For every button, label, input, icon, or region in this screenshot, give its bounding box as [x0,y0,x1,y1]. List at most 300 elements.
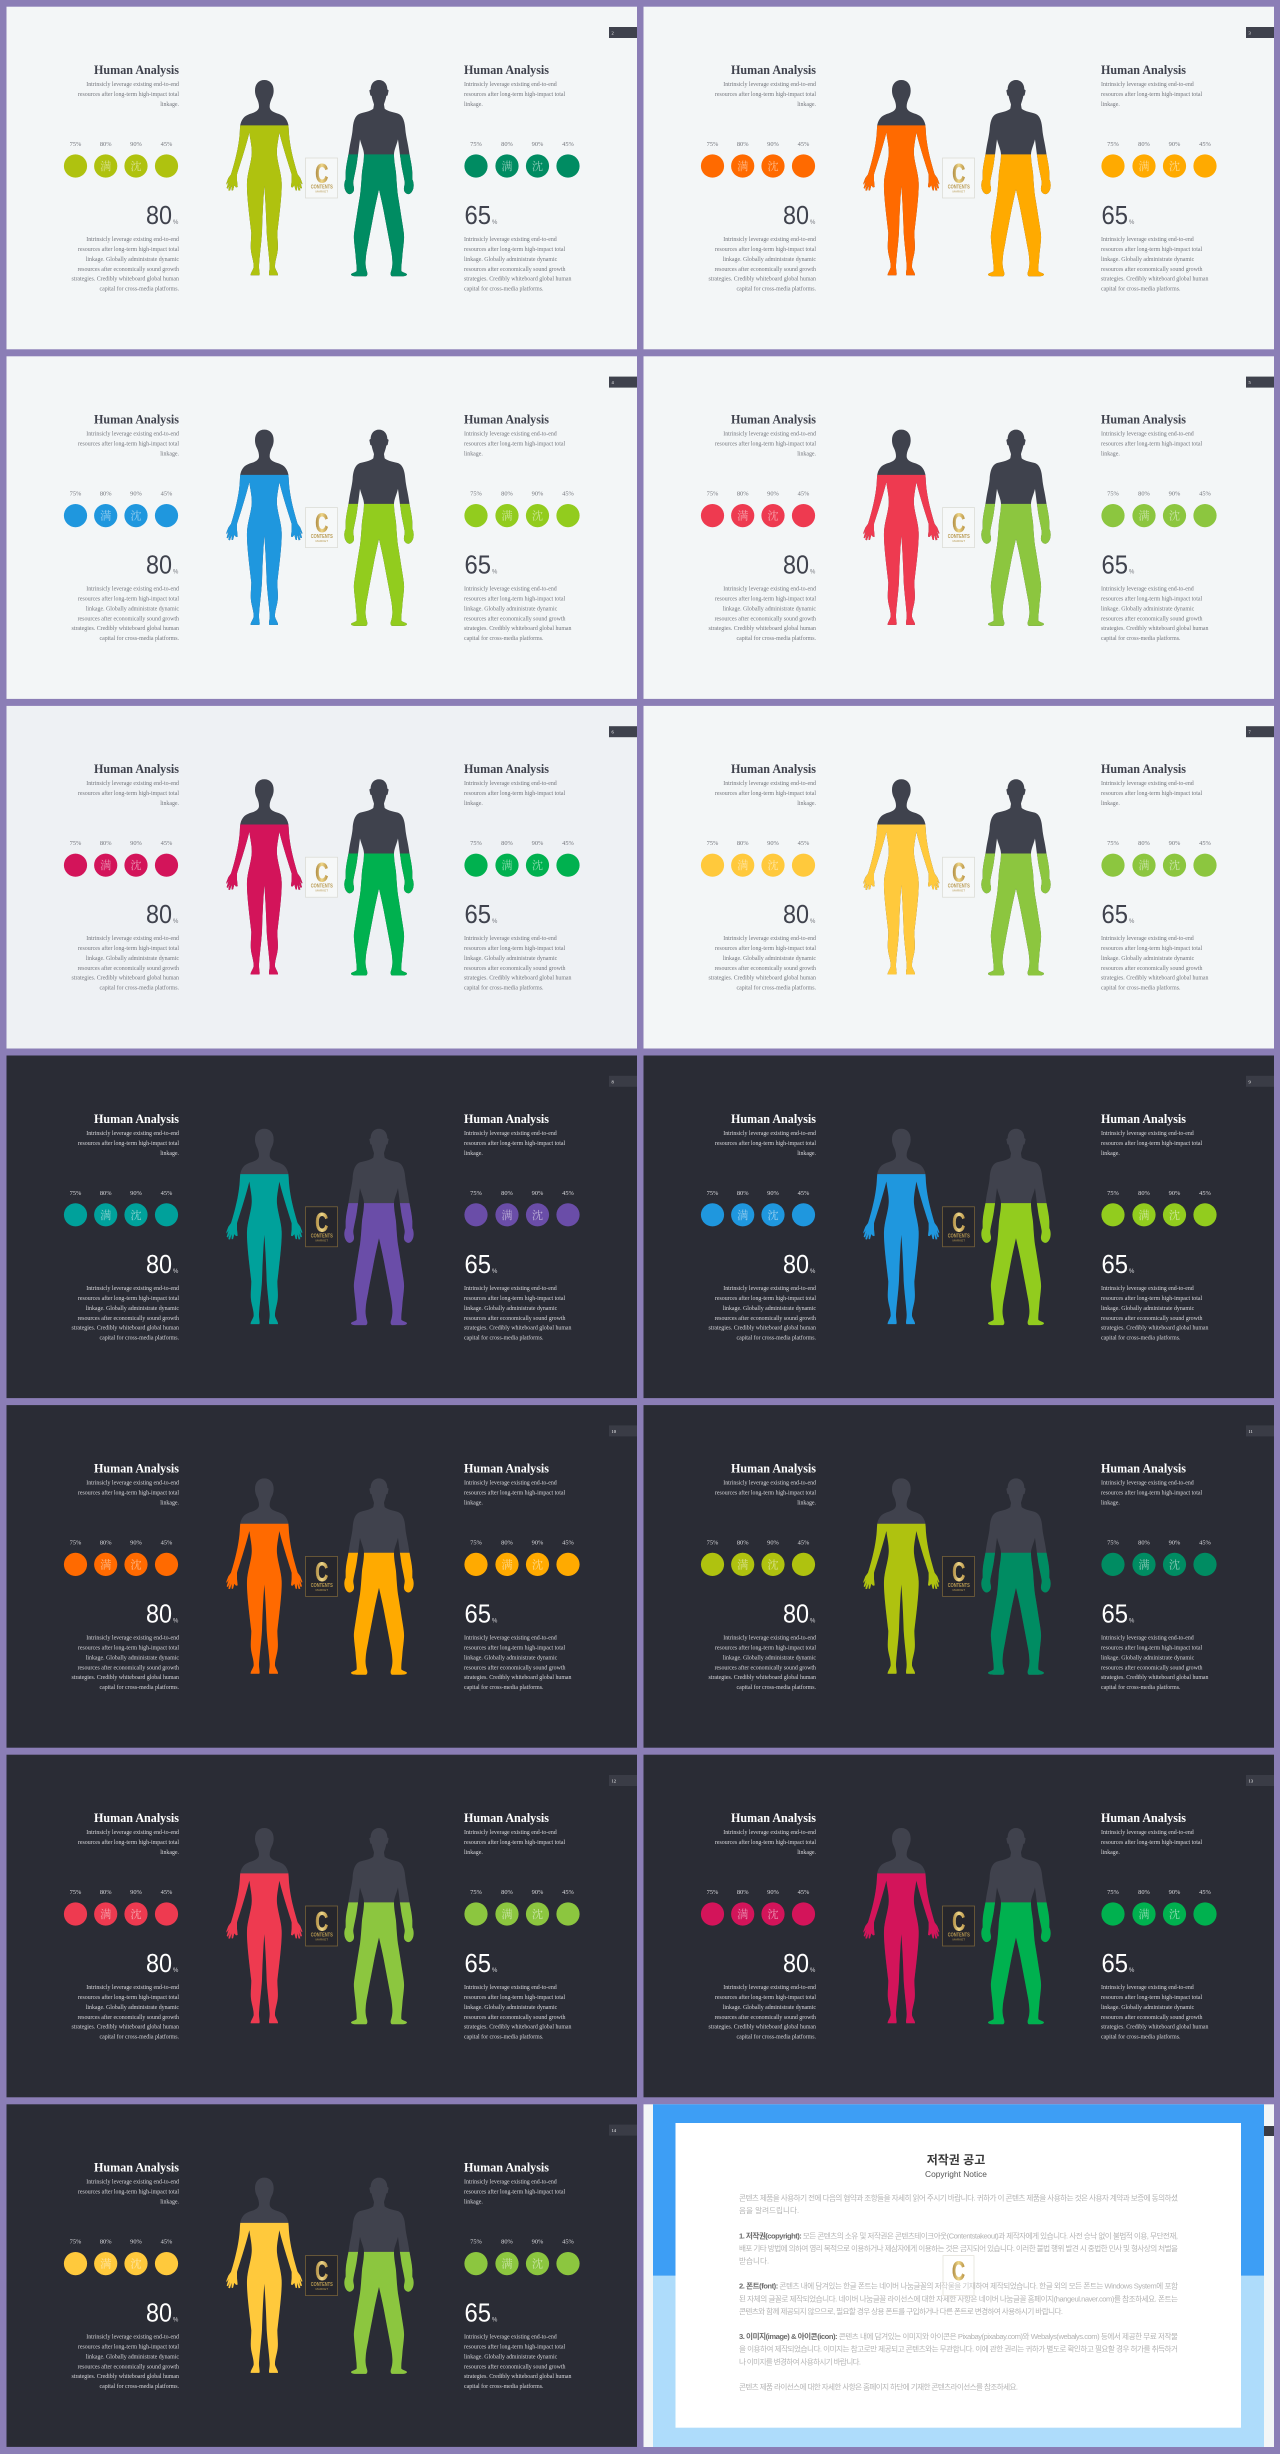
left text column: linkage. [797,1151,817,1157]
right paragraph: capital for cross-media platforms. [464,635,544,642]
right paragraph [1101,587,1209,642]
right paragraph: Intrinsicly leverage existing end-to-end [464,1286,557,1292]
left percentage circles [701,491,815,527]
left statistic: 80 [783,1950,809,1978]
right text column: resources after long-term high-impact total [464,2189,565,2196]
right paragraph: linkage. Globally administrate dynamic [464,2355,558,2361]
left percentage circles: 沈 [768,1557,778,1571]
right percentage circles [1101,141,1217,178]
right statistic: 65 [1102,552,1128,580]
right percentage circles: 75% [1107,141,1120,148]
left percentage circles: 75% [70,2239,82,2246]
left statistic: % [173,1968,179,1974]
right text column: Human Analysis [464,1111,549,1126]
contents logo: CONTENTS [948,534,970,540]
right percentage circles: 90% [532,1190,544,1197]
right percentage circles: 90% [532,2239,544,2246]
right percentage circles: 45% [562,1539,575,1546]
right percentage circles [1101,840,1217,877]
right paragraph [1101,1635,1209,1691]
notice closing line: 콘텐츠 제품 라이선스에 대한 자세한 사항은 홈페이지 하단에 기재한 콘텐츠라이선스를 참조하세요. [739,2382,1018,2392]
clause 2 font: 2. 폰트(font): 콘텐츠 내에 담겨있는 한글 폰트는 네이버 나눔글꼴의 저작물을 기재하여 제작되었습니다. 한글 외의 모든 폰트는 Windows System에 포함 [739,2280,1178,2290]
right paragraph [464,1286,572,1341]
right text column: Intrinsicly leverage existing end-to-end [464,1131,557,1137]
right text column: Human Analysis [1101,412,1186,427]
left percentage circles: 45% [161,491,173,498]
left percentage circles: 沈 [768,1208,778,1222]
right statistic: % [492,1269,498,1275]
left text column: resources after long-term high-impact total [715,1140,816,1147]
right percentage circles: 75% [470,141,483,148]
right percentage circles: 80% [1138,1889,1151,1896]
contents logo [942,857,974,897]
right paragraph [464,936,572,992]
right text column: linkage. [1101,102,1120,108]
left paragraph [709,936,817,992]
left text column: resources after long-term high-impact total [715,1839,816,1846]
right paragraph: linkage. Globally administrate dynamic [1101,2005,1195,2011]
female body figure [226,1828,302,2023]
female body figure [863,1828,939,2023]
left paragraph: Intrinsicly leverage existing end-to-end [86,1286,179,1292]
panel: slide 14 dark yellow and green [6,2104,637,2447]
clause 3 image and icon [739,2331,1178,2366]
left text column [715,62,817,108]
left percentage circles: 45% [161,1539,173,1546]
left paragraph: resources after economically sound growth [78,266,179,273]
left text column: linkage. [797,452,817,458]
right percentage circles: 45% [562,1190,575,1197]
left paragraph: resources after economically sound growth [78,2364,179,2371]
page number tag [1246,1775,1274,1786]
left text column: Human Analysis [731,761,816,776]
right text column [464,62,565,108]
left percentage circles [64,1539,178,1576]
right paragraph: resources after economically sound growth [464,965,565,972]
panel: copyright notice [644,2104,1274,2447]
right percentage circles: 75% [470,491,483,498]
left percentage circles: 满 [100,1907,111,1921]
right percentage circles: 满 [502,159,512,173]
right paragraph [464,587,572,642]
left paragraph: capital for cross-media platforms. [736,2034,817,2040]
left statistic: % [810,220,816,226]
left paragraph: resources after long-term high-impact total [78,1295,179,1302]
right percentage circles: 75% [470,1539,483,1546]
right percentage circles: 90% [1169,141,1181,148]
right text column: resources after long-term high-impact total [1101,790,1202,797]
left statistic: 80 [146,1950,172,1978]
panel: slide 7 yellow and green [644,706,1274,1048]
right paragraph: resources after long-term high-impact total [1101,1994,1202,2001]
right paragraph: capital for cross-media platforms. [1101,985,1181,992]
male body figure [344,779,414,976]
left statistic: % [810,1618,816,1624]
page number tag: 9 [1248,1079,1252,1084]
right paragraph: strategies. Credibly whiteboard global human [1101,276,1209,282]
right paragraph: strategies. Credibly whiteboard global human [464,2374,572,2380]
right text column: Intrinsicly leverage existing end-to-end [464,1480,557,1486]
left text column: Human Analysis [94,2160,179,2175]
left text column: Human Analysis [94,761,179,776]
right text column [464,1810,565,1856]
left percentage circles: 满 [100,509,111,523]
left paragraph: strategies. Credibly whiteboard global human [709,976,816,982]
left statistic: 80 [783,202,809,230]
contents logo: MARKET [953,889,965,893]
left paragraph: resources after long-term high-impact total [78,596,179,603]
right percentage circles: 75% [470,1190,483,1197]
page number tag [609,1076,637,1087]
left statistic: % [173,1618,179,1624]
left paragraph: resources after economically sound growth [78,616,179,623]
contents logo [306,2256,338,2296]
right paragraph: linkage. Globally administrate dynamic [464,1306,558,1312]
right percentage circles: 75% [470,2239,483,2246]
page number tag [609,27,637,38]
left statistic: % [810,570,816,576]
right percentage circles: 45% [1199,141,1212,148]
left percentage circles: 90% [130,2239,143,2246]
left text column: linkage. [160,1500,180,1506]
left percentage circles: 90% [130,141,143,148]
right percentage circles: 满 [502,509,512,523]
contents logo: CONTENTS [948,184,970,190]
contents logo watermark [943,2256,974,2296]
right percentage circles: 45% [1199,1539,1212,1546]
clause 3 image and icon: 3. 이미지(image) & 아이콘(icon): 콘텐츠 내에 담겨있는 이미지와 아이콘은 Pixabay(pixabay.com)와 Webalys(webalys.com) 등에서 제공한 무료 저작물 [739,2331,1178,2341]
left text column: linkage. [160,102,180,108]
right paragraph: resources after economically sound growth [464,1315,565,1322]
left text column: linkage. [160,801,180,807]
right paragraph: capital for cross-media platforms. [464,2383,544,2390]
right percentage circles: 满 [502,1907,512,1921]
right percentage circles: 45% [562,491,575,498]
right paragraph: Intrinsicly leverage existing end-to-end [464,2335,557,2341]
right statistic: % [1129,1968,1135,1974]
left percentage circles: 沈 [130,509,142,523]
right statistic: 65 [1102,1600,1128,1628]
left percentage circles: 80% [100,141,112,148]
contents logo: C [952,1557,965,1587]
right percentage circles: 75% [1107,1539,1120,1546]
left percentage circles: 沈 [768,509,778,523]
right percentage circles: 90% [1169,1539,1181,1546]
right text column: Human Analysis [464,62,549,77]
blue upper background [653,2104,1264,2276]
right percentage circles [464,840,580,877]
left paragraph: linkage. Globally administrate dynamic [723,2005,816,2011]
right statistic: % [492,919,498,925]
left paragraph: resources after long-term high-impact total [715,596,816,603]
right paragraph: resources after long-term high-impact total [1101,246,1202,253]
right text column [1101,1810,1202,1856]
contents logo: CONTENTS [948,1932,970,1938]
right text column [1101,1460,1202,1506]
left paragraph [709,1286,817,1341]
left percentage circles: 满 [737,858,748,872]
left paragraph: linkage. Globally administrate dynamic [86,2355,179,2361]
contents logo [942,1207,974,1247]
female body figure [863,779,939,975]
contents logo: C [315,1207,328,1237]
right percentage circles: 75% [1107,1889,1120,1896]
right text column: linkage. [464,2200,483,2206]
right percentage circles: 沈 [1169,1907,1180,1921]
right text column: linkage. [464,452,483,458]
right text column: Human Analysis [464,2160,549,2175]
page number tag: 13 [1248,1778,1254,1784]
right paragraph: capital for cross-media platforms. [1101,2034,1181,2040]
left percentage circles [701,1889,815,1926]
contents logo: C [315,158,328,188]
right text column [464,1111,565,1157]
left paragraph: resources after economically sound growth [78,2014,179,2021]
contents logo: CONTENTS [311,884,333,890]
left paragraph: strategies. Credibly whiteboard global human [72,1325,179,1331]
right text column: Intrinsicly leverage existing end-to-end [1101,432,1194,438]
male body figure [981,1828,1051,2024]
left paragraph: capital for cross-media platforms. [100,1334,180,1341]
left paragraph: strategies. Credibly whiteboard global human [72,2374,179,2380]
right percentage circles: 90% [1169,840,1181,847]
right paragraph: linkage. Globally administrate dynamic [1101,1306,1195,1312]
right paragraph: resources after long-term high-impact total [464,1295,565,1302]
right text column: resources after long-term high-impact total [1101,441,1202,448]
left paragraph: strategies. Credibly whiteboard global human [72,1675,179,1681]
left percentage circles: 45% [161,2239,173,2246]
right paragraph: Intrinsicly leverage existing end-to-end [1101,936,1194,942]
left text column: Intrinsicly leverage existing end-to-end [86,1830,179,1836]
left percentage circles: 90% [130,491,143,498]
left paragraph [72,1635,180,1691]
right percentage circles [464,141,580,178]
page number tag: 6 [612,730,614,735]
male body figure [981,1478,1051,1675]
right text column: linkage. [464,102,483,108]
right paragraph: resources after long-term high-impact total [1101,1644,1202,1651]
left paragraph: Intrinsicly leverage existing end-to-end [86,936,179,942]
left percentage circles: 75% [707,491,719,498]
page number tag [1246,27,1274,38]
left percentage circles: 沈 [130,858,142,872]
left paragraph: linkage. Globally administrate dynamic [723,1306,816,1312]
left statistic: 80 [783,552,809,580]
contents logo: MARKET [953,1238,965,1242]
left text column: Human Analysis [94,412,179,427]
right percentage circles: 80% [501,141,514,148]
right paragraph: Intrinsicly leverage existing end-to-end [1101,237,1194,243]
left percentage circles: 80% [100,1190,112,1197]
left paragraph: Intrinsicly leverage existing end-to-end [86,2335,179,2341]
left text column: Intrinsicly leverage existing end-to-end [723,432,816,438]
left text column: resources after long-term high-impact total [715,441,816,448]
left percentage circles: 90% [130,1190,143,1197]
right percentage circles: 80% [1138,491,1151,498]
panel: slide 6 crimson and green [6,706,637,1048]
left percentage circles: 90% [767,491,780,498]
notice intro: 콘텐츠 제품을 사용하기 전에 다음의 협약과 조항들을 자세히 읽어 주시기 바랍니다. 귀하가 이 콘텐츠 제품을 사용하는 것은 사용자 계약과 보증에 동의하셨 [739,2192,1178,2202]
left paragraph: Intrinsicly leverage existing end-to-end [723,237,816,243]
left text column: Human Analysis [94,1460,179,1475]
right percentage circles: 满 [502,858,512,872]
right paragraph: capital for cross-media platforms. [1101,1334,1181,1341]
left percentage circles: 沈 [768,1907,778,1921]
page number tag [609,377,637,388]
left paragraph: capital for cross-media platforms. [100,1684,180,1691]
left paragraph: strategies. Credibly whiteboard global human [709,2024,816,2030]
female body figure [226,2178,302,2373]
right percentage circles: 45% [1199,491,1212,498]
left paragraph: Intrinsicly leverage existing end-to-end [86,237,179,243]
left percentage circles [701,840,815,877]
right percentage circles: 45% [1199,1190,1212,1197]
left paragraph [72,936,180,992]
left paragraph: linkage. Globally administrate dynamic [723,1655,816,1661]
right paragraph: capital for cross-media platforms. [464,286,544,292]
left paragraph: strategies. Credibly whiteboard global human [709,1325,816,1331]
right paragraph [1101,237,1209,292]
left paragraph: resources after long-term high-impact total [78,1644,179,1651]
right paragraph: linkage. Globally administrate dynamic [464,1655,558,1661]
left text column: Human Analysis [731,1810,816,1825]
left paragraph: linkage. Globally administrate dynamic [86,2005,179,2011]
left paragraph [709,237,817,292]
right percentage circles [1101,1190,1217,1226]
right percentage circles: 满 [502,1557,512,1571]
left text column [715,761,817,807]
panel: slide 5 red and green [644,356,1274,699]
left text column: Human Analysis [94,62,179,77]
right text column: resources after long-term high-impact total [1101,1140,1202,1147]
contents logo: MARKET [953,1588,965,1592]
left statistic: % [173,2318,179,2324]
left text column: linkage. [160,1151,180,1157]
left paragraph: strategies. Credibly whiteboard global human [72,626,179,632]
right text column: resources after long-term high-impact total [1101,1839,1202,1846]
right paragraph: resources after long-term high-impact total [1101,596,1202,603]
left paragraph: linkage. Globally administrate dynamic [723,607,816,613]
right percentage circles: 沈 [1169,1557,1180,1571]
left paragraph: resources after long-term high-impact total [715,246,816,253]
right paragraph [1101,936,1209,992]
right text column: Intrinsicly leverage existing end-to-end [464,781,557,787]
male body figure [981,1129,1051,1325]
left statistic: % [173,220,179,226]
contents logo [306,1906,338,1946]
left percentage circles: 80% [737,491,749,498]
right paragraph: linkage. Globally administrate dynamic [464,257,558,263]
right text column: Human Analysis [1101,1111,1186,1126]
left paragraph: strategies. Credibly whiteboard global human [709,276,816,282]
right statistic: % [492,570,498,576]
right paragraph: resources after long-term high-impact total [464,1994,565,2001]
left text column: resources after long-term high-impact total [715,91,816,98]
left percentage circles [64,2239,178,2275]
right statistic: 65 [464,901,491,929]
left paragraph: strategies. Credibly whiteboard global human [72,976,179,982]
right text column: linkage. [1101,1151,1120,1157]
right percentage circles: 90% [532,491,544,498]
left percentage circles: 沈 [130,159,142,173]
male body figure [344,2178,414,2374]
left text column [78,761,180,807]
right text column [1101,1111,1202,1157]
page number tag: 12 [612,1778,616,1784]
right paragraph: linkage. Globally administrate dynamic [464,607,558,613]
right paragraph: capital for cross-media platforms. [464,1334,544,1341]
right text column [1101,62,1202,108]
right text column: Intrinsicly leverage existing end-to-end [1101,1480,1194,1486]
left text column: linkage. [797,801,817,807]
left percentage circles: 满 [100,2257,111,2271]
female body figure [226,430,302,625]
left percentage circles: 45% [161,1190,173,1197]
right text column: Human Analysis [1101,761,1186,776]
right statistic: % [1129,1269,1135,1275]
contents logo: CONTENTS [311,2282,333,2288]
left text column [715,1111,817,1157]
right percentage circles: 沈 [1169,159,1180,173]
left text column: resources after long-term high-impact total [78,441,179,448]
right paragraph: strategies. Credibly whiteboard global human [1101,626,1209,632]
right paragraph: resources after economically sound growth [1101,266,1202,273]
page number tag [1246,377,1274,388]
left percentage circles: 满 [737,1907,748,1921]
left percentage circles: 80% [737,840,749,847]
right percentage circles: 满 [1138,1208,1150,1222]
right paragraph: linkage. Globally administrate dynamic [1101,956,1195,962]
left statistic: 80 [146,552,172,580]
contents logo: C [952,1207,965,1237]
left text column: Intrinsicly leverage existing end-to-end [86,2180,179,2186]
page number tag: 14 [612,2128,617,2133]
contents logo [942,158,974,198]
left paragraph: resources after economically sound growth [715,1315,816,1322]
right paragraph: linkage. Globally administrate dynamic [1101,607,1195,613]
left text column [78,1460,180,1506]
notice intro: 음을 알려드립니다. [739,2205,799,2215]
right percentage circles: 满 [1138,509,1150,523]
left percentage circles [64,1190,178,1226]
left paragraph: Intrinsicly leverage existing end-to-end [86,587,179,593]
left paragraph [72,587,180,642]
right percentage circles: 80% [1138,1190,1151,1197]
right statistic: % [1129,220,1135,226]
right percentage circles: 沈 [532,159,543,173]
left paragraph: strategies. Credibly whiteboard global human [709,626,816,632]
left text column: resources after long-term high-impact total [715,790,816,797]
left text column: Intrinsicly leverage existing end-to-end [86,781,179,787]
left percentage circles: 45% [798,1889,810,1896]
left paragraph: capital for cross-media platforms. [100,2383,180,2390]
left text column [78,1111,180,1157]
left text column: linkage. [160,452,180,458]
left paragraph: Intrinsicly leverage existing end-to-end [723,1985,816,1991]
left percentage circles: 45% [161,840,173,847]
right percentage circles: 90% [532,141,544,148]
left percentage circles: 沈 [130,2257,142,2271]
contents logo: C [952,158,965,188]
right percentage circles: 80% [501,1190,514,1197]
clause 1 copyright: 받습니다. [739,2256,769,2266]
right paragraph: capital for cross-media platforms. [464,2034,544,2040]
left statistic: 80 [783,901,809,929]
male body figure [344,1129,414,1325]
right paragraph: strategies. Credibly whiteboard global human [464,2024,572,2030]
left percentage circles: 80% [737,1190,749,1197]
right paragraph [1101,1985,1209,2040]
